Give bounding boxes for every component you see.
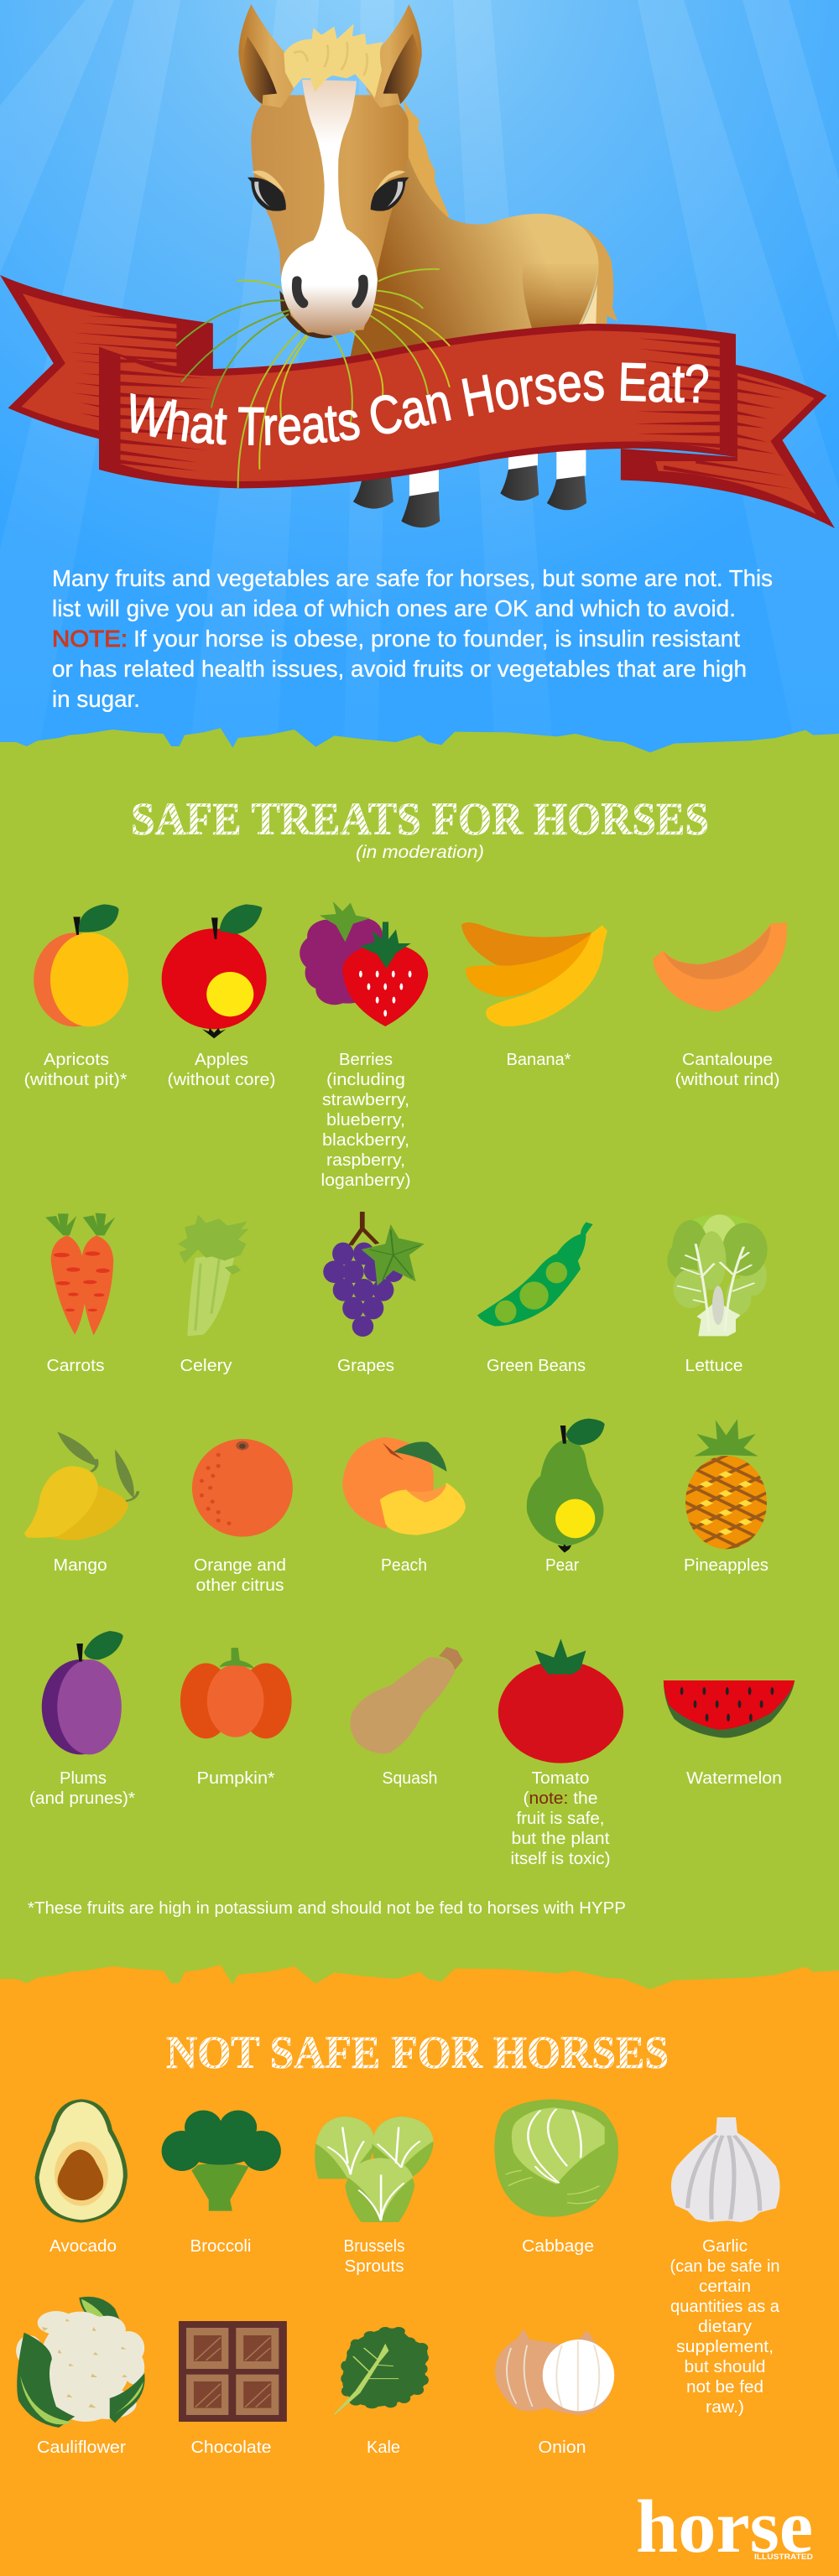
- label: kale: Kale: [367, 2438, 400, 2457]
- intro text: in sugar.: [52, 686, 140, 712]
- label: peach: Peach: [381, 1556, 427, 1575]
- label: plums: (and prunes)*: [29, 1789, 135, 1808]
- label: orange: [194, 1556, 286, 1595]
- horse illustration: legs: [353, 442, 586, 527]
- subheading: (in moderation): [356, 843, 484, 862]
- label: apricots: Apricots: [44, 1051, 109, 1069]
- label: berries: Berries: [339, 1051, 393, 1069]
- intro text: If your horse is obese, prone to founder, is insulin resistant: [133, 626, 740, 652]
- icon: mango: [24, 1431, 138, 1540]
- label: apricots: [23, 1051, 128, 1089]
- label: cauliflower: Cauliflower: [37, 2438, 126, 2457]
- label: tomato: but the plant: [512, 1830, 610, 1848]
- heading: safe treats: SAFE TREATS FOR HORSES: [131, 793, 709, 844]
- icon: berries: [300, 901, 428, 1026]
- label: orange: Orange and: [194, 1556, 286, 1575]
- logo: horse illustrated: ILLUSTRATED: [754, 2553, 813, 2562]
- label: grapes: Grapes: [337, 1357, 394, 1375]
- icon: tomato: [498, 1639, 623, 1763]
- icon: orange: [192, 1439, 293, 1537]
- logo: horse illustrated: horse: [636, 2485, 813, 2568]
- label: garlic: raw.): [706, 2398, 744, 2417]
- label: berries: [320, 1051, 411, 1190]
- icon: plum: [42, 1631, 123, 1754]
- label: brussels sprouts: Sprouts: [344, 2257, 404, 2276]
- icon: brussels sprouts: [315, 2116, 434, 2222]
- label: garlic: (can be safe in: [670, 2257, 780, 2276]
- label: apricots: (without pit)*: [23, 1071, 128, 1089]
- label: chocolate: Chocolate: [191, 2438, 272, 2457]
- icon: avocado: [34, 2099, 128, 2223]
- label: berries: (including: [326, 1071, 405, 1089]
- label: garlic: supplement,: [676, 2338, 774, 2356]
- label: watermelon: Watermelon: [686, 1769, 782, 1788]
- icon: pear: [527, 1419, 605, 1553]
- label: garlic: not be fed: [686, 2378, 763, 2397]
- label: broccoli: Broccoli: [190, 2237, 252, 2256]
- label: carrots: Carrots: [47, 1357, 104, 1375]
- label: berries: blueberry,: [326, 1111, 405, 1130]
- icon: apple: [162, 904, 267, 1038]
- icon: watermelon: [664, 1680, 795, 1738]
- label: tomato: (note: the: [524, 1789, 597, 1808]
- panel: not safe orange background: [0, 1965, 839, 2576]
- label: orange: other citrus: [196, 1576, 284, 1595]
- label: apples: [168, 1051, 275, 1089]
- hay strands in horse's mouth: [176, 269, 450, 487]
- intro text: or has related health issues, avoid fruits or vegetables that are high: [52, 656, 747, 682]
- intro text: [52, 565, 773, 712]
- label: pumpkin: Pumpkin*: [196, 1769, 275, 1788]
- label: plums: Plums: [60, 1769, 107, 1788]
- label: apples: (without core): [168, 1071, 275, 1089]
- intro text: Many fruits and vegetables are safe for horses, but some are not. This: [52, 565, 773, 591]
- label: cantaloupe: [675, 1051, 780, 1089]
- label: avocado: Avocado: [50, 2237, 117, 2256]
- label: pear: Pear: [545, 1556, 579, 1575]
- label: garlic: but should: [685, 2358, 765, 2376]
- label: green beans: Green Beans: [487, 1357, 586, 1375]
- label: cantaloupe: Cantaloupe: [682, 1051, 773, 1069]
- label: berries: strawberry,: [322, 1091, 409, 1109]
- label: lettuce: Lettuce: [685, 1357, 743, 1375]
- red ribbon banner: [0, 275, 835, 528]
- label: mango: Mango: [54, 1556, 107, 1575]
- icon: banana: [461, 922, 607, 1026]
- background: blue sky with sun rays: [0, 0, 839, 839]
- label: garlic: certain: [699, 2277, 751, 2296]
- icon: celery: [178, 1214, 249, 1336]
- icon: lettuce: [667, 1214, 768, 1336]
- intro text: NOTE:: [52, 626, 128, 652]
- icon: pumpkin: [180, 1648, 292, 1738]
- label: tomato: [510, 1769, 611, 1868]
- icon: chocolate: [179, 2321, 287, 2422]
- label: berries: blackberry,: [322, 1131, 409, 1150]
- footnote: *These fruits are high in potassium and should not be fed to horses with HYPP: [28, 1899, 626, 1918]
- label: brussels sprouts: Brussels: [344, 2237, 404, 2256]
- icon: squash: [350, 1647, 463, 1753]
- label: squash: Squash: [383, 1769, 438, 1788]
- icon: kale: [335, 2327, 429, 2414]
- label: garlic: [670, 2237, 780, 2417]
- label: berries: raspberry,: [326, 1151, 405, 1170]
- label: celery: Celery: [180, 1357, 232, 1375]
- label: brussels sprouts: [344, 2237, 404, 2276]
- horse illustration: body and head: [238, 4, 618, 361]
- icon: cauliflower: [16, 2297, 145, 2428]
- label: tomato: itself is toxic): [510, 1850, 611, 1868]
- panel: safe treats green background: [0, 728, 839, 2214]
- label: tomato: Tomato: [532, 1769, 589, 1788]
- label: plums: [29, 1769, 135, 1808]
- icon: broccoli: [162, 2111, 281, 2211]
- label: berries: loganberry): [320, 1171, 411, 1190]
- label: garlic: Garlic: [702, 2237, 748, 2256]
- label: banana: Banana*: [507, 1051, 571, 1069]
- label: tomato: fruit is safe,: [517, 1810, 604, 1828]
- icon: cabbage: [494, 2099, 618, 2217]
- icon: grapes: [323, 1212, 425, 1337]
- icon: apricot: [34, 904, 128, 1026]
- label: onion: Onion: [539, 2438, 586, 2457]
- intro text: list will give you an idea of which ones are OK and which to avoid.: [52, 595, 736, 621]
- icon: pineapple: [685, 1419, 767, 1550]
- icon: cantaloupe: [653, 922, 787, 1012]
- label: cabbage: Cabbage: [522, 2237, 594, 2256]
- label: apples: Apples: [195, 1051, 248, 1069]
- icon: peach: [342, 1437, 466, 1535]
- label: garlic: quantities as a: [670, 2298, 780, 2316]
- label: garlic: dietary: [698, 2318, 752, 2336]
- icon: carrots: [45, 1213, 115, 1335]
- title: What Treats Can Horses Eat?: [130, 362, 708, 445]
- label: cantaloupe: (without rind): [675, 1071, 780, 1089]
- icon: garlic: [671, 2117, 780, 2222]
- label: pineapples: Pineapples: [684, 1556, 769, 1575]
- icon: onion: [495, 2329, 614, 2415]
- icon: green beans: [477, 1222, 593, 1327]
- heading: not safe: NOT SAFE FOR HORSES: [166, 2027, 669, 2078]
